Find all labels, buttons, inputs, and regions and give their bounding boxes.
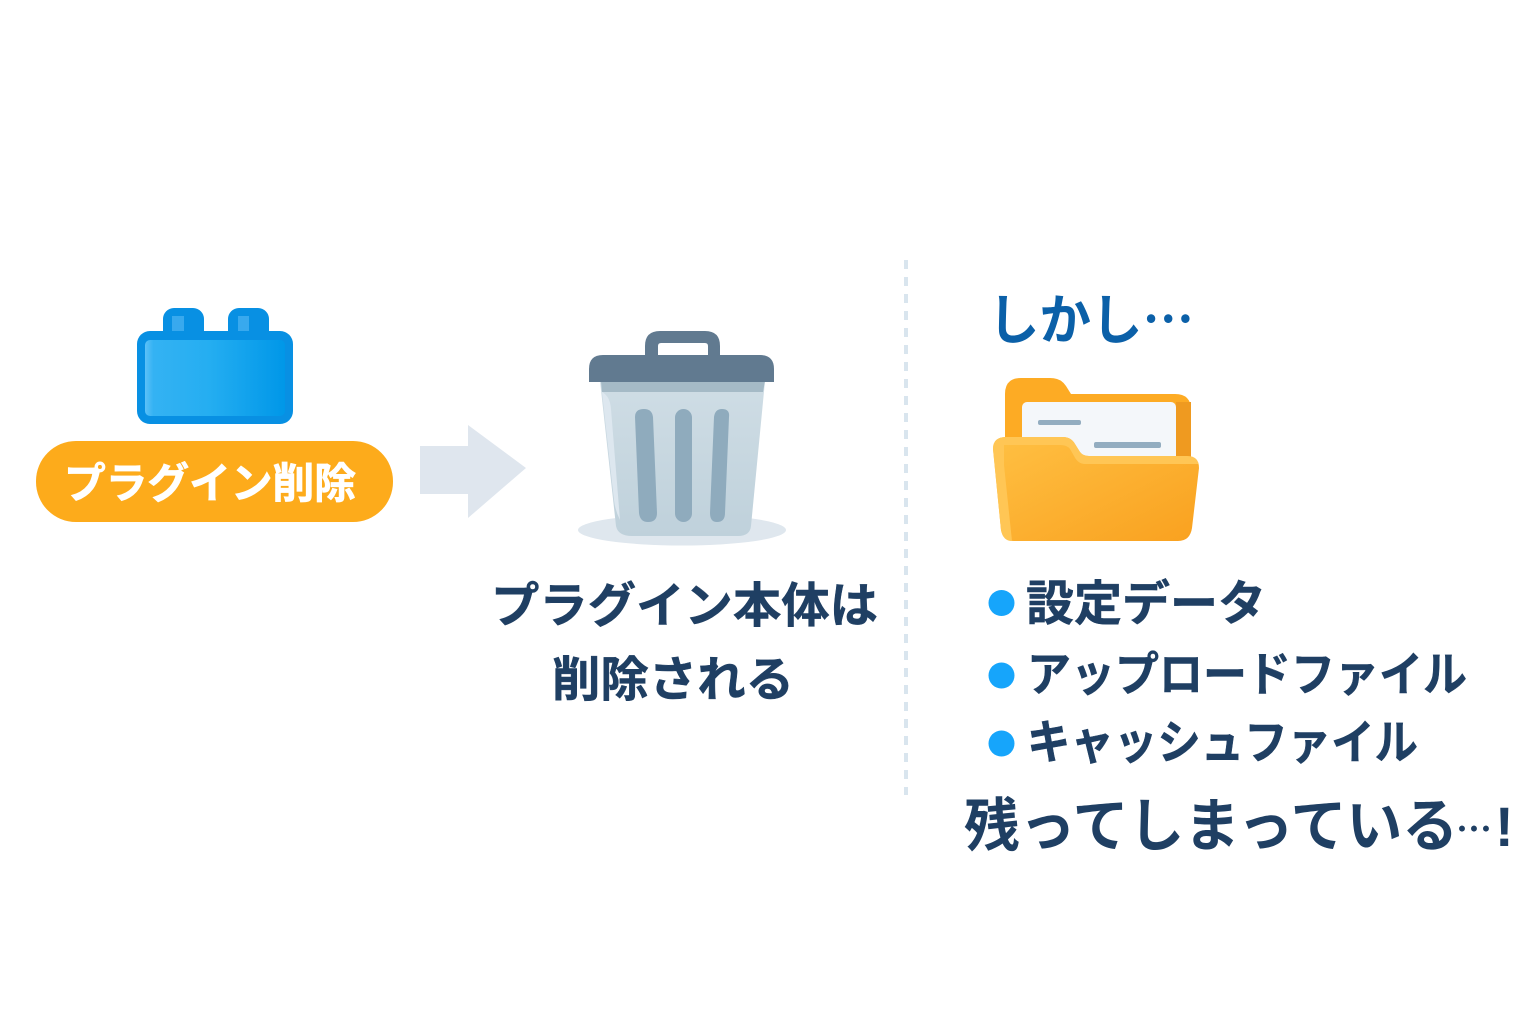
text: plugin body deleted: プラグイン本体は — [491, 580, 878, 633]
arrow — [420, 425, 526, 518]
icon: plugin block — [137, 308, 293, 424]
list: remaining files — [988, 578, 1467, 769]
list: remaining files: アップロードファイル — [1027, 648, 1467, 701]
list: remaining files: 設定データ — [1026, 578, 1266, 631]
icon: folder — [993, 378, 1199, 541]
text: still remaining: ! — [1495, 795, 1514, 858]
text: still remaining: 残ってしまっている — [964, 779, 1458, 863]
badge: plugin delete — [36, 441, 393, 522]
text: plugin body deleted: 削除される — [552, 654, 794, 707]
heading: however: しかし… — [988, 276, 1194, 355]
icon: trash can — [578, 331, 786, 546]
text: still remaining: … — [1456, 801, 1492, 853]
list: remaining files: キャッシュファイル — [1027, 716, 1418, 769]
text: plugin body deleted — [491, 580, 878, 707]
badge: plugin delete: プラグイン削除 — [64, 460, 356, 507]
